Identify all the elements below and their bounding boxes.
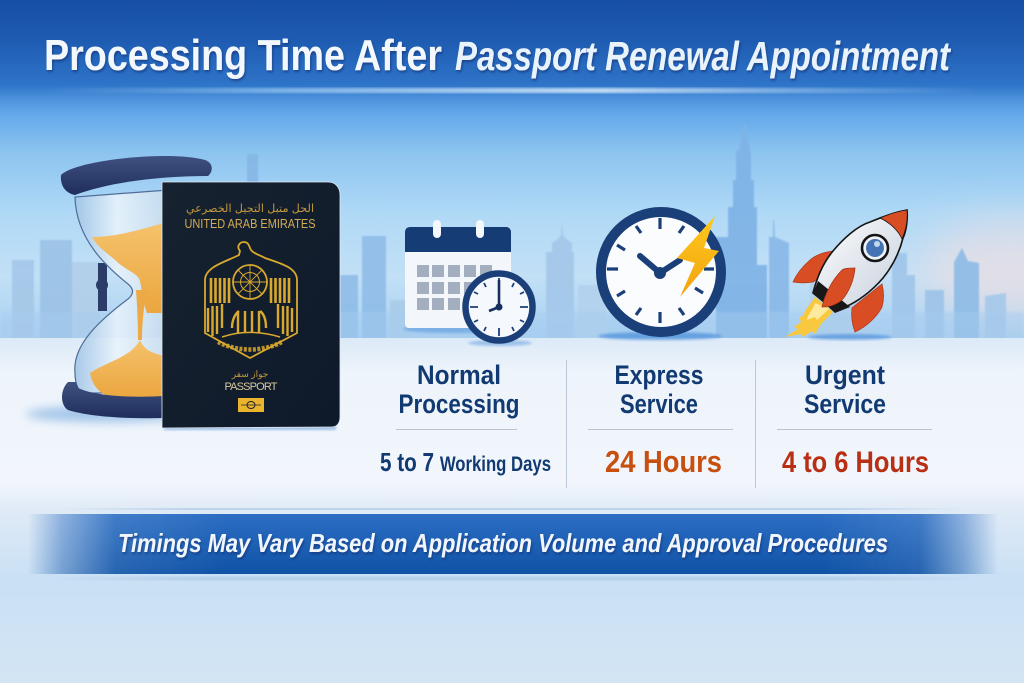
city skyline [12, 123, 1006, 345]
icon: clock with lightning bolt [598, 212, 722, 340]
value: urgent service: 4 to 6 Hours [782, 446, 929, 479]
footer banner: Timings May Vary Based on Application Volume and Approval Procedures [118, 528, 888, 558]
title: Processing Time After [44, 31, 442, 80]
value: express service: 24 Hours [605, 444, 722, 479]
hourglass icon [25, 156, 212, 422]
heading: urgent service: Service [804, 389, 886, 419]
passport arabic heading: الحل متبل التجيل الخصرعي [186, 203, 314, 215]
passport label: PASSPORT [224, 381, 278, 393]
panel: normal processing [380, 220, 551, 477]
floor background [0, 338, 1024, 683]
heading: urgent service: Urgent [805, 360, 885, 390]
passport [162, 182, 340, 430]
heading: express service [614, 360, 704, 419]
panel: express service [588, 212, 733, 479]
footer banner [28, 508, 998, 580]
heading: express service: Express [614, 360, 704, 390]
skyline base haze [0, 312, 1024, 340]
heading: normal processing: Processing [398, 389, 520, 419]
background sky [0, 0, 1024, 345]
heading: normal processing [398, 360, 520, 419]
heading: express service: Service [620, 389, 698, 419]
icon: calendar with clock [403, 220, 532, 346]
passport emblem [205, 242, 297, 358]
passport country name: UNITED ARAB EMIRATES [184, 217, 316, 231]
icon: rocket [785, 210, 907, 340]
passport small arabic and bird: جواز سفر [231, 369, 268, 379]
title underline [45, 88, 975, 93]
panel: urgent service [777, 210, 932, 479]
hourglass back post [96, 263, 108, 311]
value: normal processing: 5 to 7 Working Days [380, 447, 551, 477]
passport chip [238, 398, 264, 412]
heading: normal processing: Normal [417, 360, 501, 390]
heading: urgent service [804, 360, 886, 419]
title [44, 31, 952, 80]
